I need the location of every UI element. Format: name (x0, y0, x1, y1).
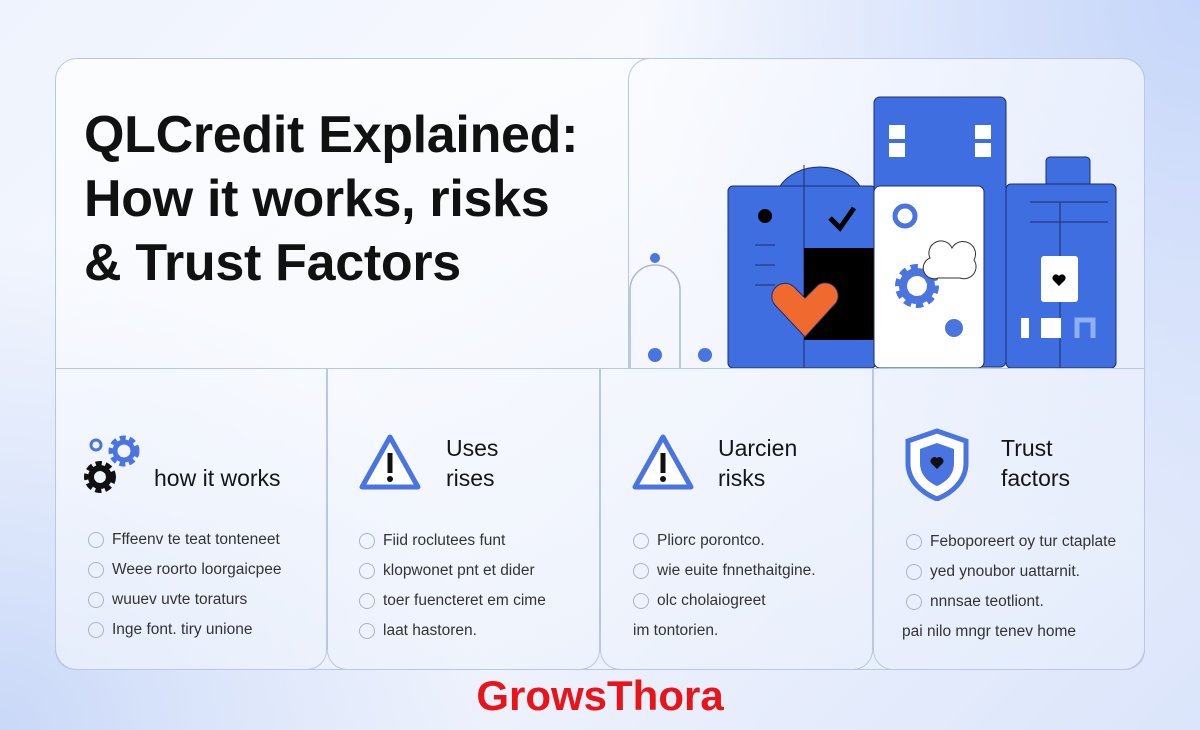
list (88, 531, 281, 638)
icon: warning (360, 434, 420, 490)
icon: gears (84, 436, 140, 493)
title (84, 106, 578, 292)
heading: how it works (154, 465, 281, 491)
heading (446, 435, 498, 491)
list: toer fuencteret em cime (383, 592, 546, 609)
brand: GrowsThora (476, 672, 724, 719)
title: How it works, risks (84, 170, 549, 228)
list: Weee roorto loorgaicpee (112, 561, 281, 578)
tall building (874, 96, 1006, 366)
heading (1001, 435, 1070, 491)
list: Feboporeert oy tur ctaplate (930, 533, 1116, 550)
list (359, 532, 546, 639)
list: wie euite fnnethaitgine. (657, 562, 816, 579)
list: yed ynoubor uattarnit. (930, 563, 1080, 580)
panel: how it works (55, 368, 327, 670)
arch (630, 252, 680, 368)
heading: Trust (1001, 435, 1053, 461)
list: klopwonet pnt et dider (383, 562, 535, 579)
heading: factors (1001, 465, 1070, 491)
white card (874, 186, 984, 368)
list: im tontorien. (633, 622, 718, 639)
list: Fiid roclutees funt (383, 532, 505, 549)
heading: risks (718, 465, 765, 491)
right building (1006, 156, 1116, 368)
panel: uses rises (327, 368, 600, 670)
flowers (648, 348, 712, 362)
list (902, 533, 1116, 640)
heading: rises (446, 465, 495, 491)
title: & Trust Factors (84, 234, 461, 292)
list (633, 532, 816, 639)
list: wuuev uvte toraturs (112, 591, 247, 608)
list: pai nilo mngr tenev home (902, 623, 1076, 640)
icon: warning (632, 434, 694, 490)
heading: Uarcien (718, 435, 797, 461)
heading (718, 435, 797, 491)
icon: shield (906, 428, 968, 501)
list: nnnsae teotliont. (930, 593, 1044, 610)
heading: Uses (446, 435, 498, 461)
list: Fffeenv te teat tonteneet (112, 531, 280, 548)
illustration panel (628, 58, 1145, 368)
list: olc cholaiogreet (657, 592, 766, 609)
list: laat hastoren. (383, 622, 477, 639)
panel: trust factors (873, 368, 1145, 670)
outer frame (55, 58, 1145, 670)
dome building (728, 164, 876, 368)
title: QLCredit Explained: (84, 106, 578, 164)
list: Inge font. tiry unione (112, 621, 252, 638)
panel: uarcien risks (600, 368, 873, 670)
list: Pliorc porontco. (657, 532, 765, 549)
